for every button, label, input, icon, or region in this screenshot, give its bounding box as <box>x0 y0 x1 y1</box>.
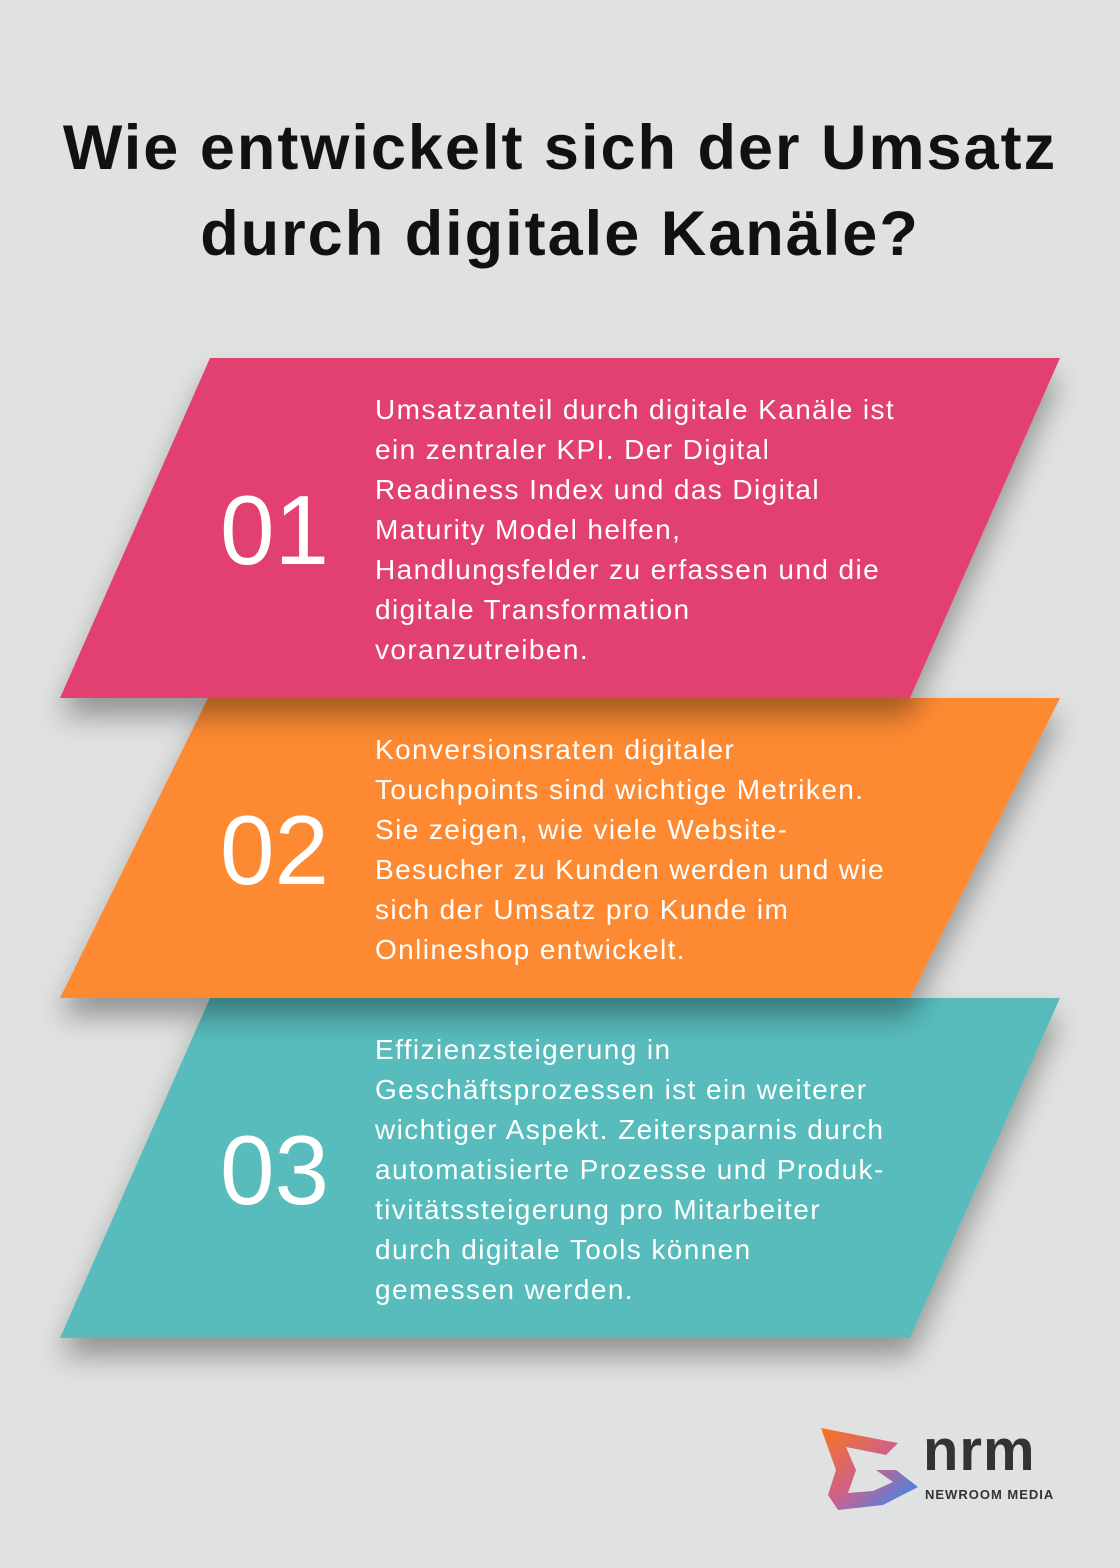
text 02 <box>375 734 885 965</box>
text 02: Touchpoints sind wichtige Metriken. <box>375 774 864 805</box>
text 02: sich der Umsatz pro Kunde im <box>375 894 789 925</box>
panel 1 <box>60 358 1060 698</box>
text 03 <box>375 1034 885 1305</box>
text 02: Onlineshop entwickelt. <box>375 934 686 965</box>
number 02: 02 <box>220 795 329 905</box>
title: durch digitale Kanäle? <box>200 199 920 269</box>
text 02: Konversionsraten digitaler <box>375 734 735 765</box>
panel 3 <box>60 998 1060 1338</box>
title: Wie entwickelt sich der Umsatz <box>63 113 1057 183</box>
text 01 <box>375 394 895 665</box>
text 03: Geschäftsprozessen ist ein weiterer <box>375 1074 868 1105</box>
text 01: Umsatzanteil durch digitale Kanäle ist <box>375 394 895 425</box>
text 02: Sie zeigen, wie viele Website- <box>375 814 788 845</box>
number 03: 03 <box>220 1115 329 1225</box>
text 01: digitale Transformation <box>375 594 690 625</box>
text 03: gemessen werden. <box>375 1274 634 1305</box>
panel 2 <box>60 698 1060 998</box>
text 01: ein zentraler KPI. Der Digital <box>375 434 770 465</box>
text 03: durch digitale Tools können <box>375 1234 752 1265</box>
text 01: Maturity Model helfen, <box>375 514 681 545</box>
text 03: wichtiger Aspekt. Zeitersparnis durch <box>375 1114 884 1145</box>
text 03: Effizienzsteigerung in <box>375 1034 671 1065</box>
text 03: tivitätssteigerung pro Mitarbeiter <box>375 1194 821 1225</box>
title <box>63 113 1057 269</box>
icon: logo mark <box>821 1428 918 1510</box>
text 01: voranzutreiben. <box>375 634 589 665</box>
logo: NEWROOM MEDIA <box>925 1487 1054 1502</box>
text 02: Besucher zu Kunden werden und wie <box>375 854 885 885</box>
logo <box>821 1418 1054 1510</box>
text 01: Handlungsfelder zu erfassen und die <box>375 554 880 585</box>
number 01: 01 <box>220 475 329 585</box>
text 03: automatisierte Prozesse und Produk- <box>375 1154 885 1185</box>
text 01: Readiness Index und das Digital <box>375 474 820 505</box>
logo text: nrm <box>923 1418 1036 1483</box>
